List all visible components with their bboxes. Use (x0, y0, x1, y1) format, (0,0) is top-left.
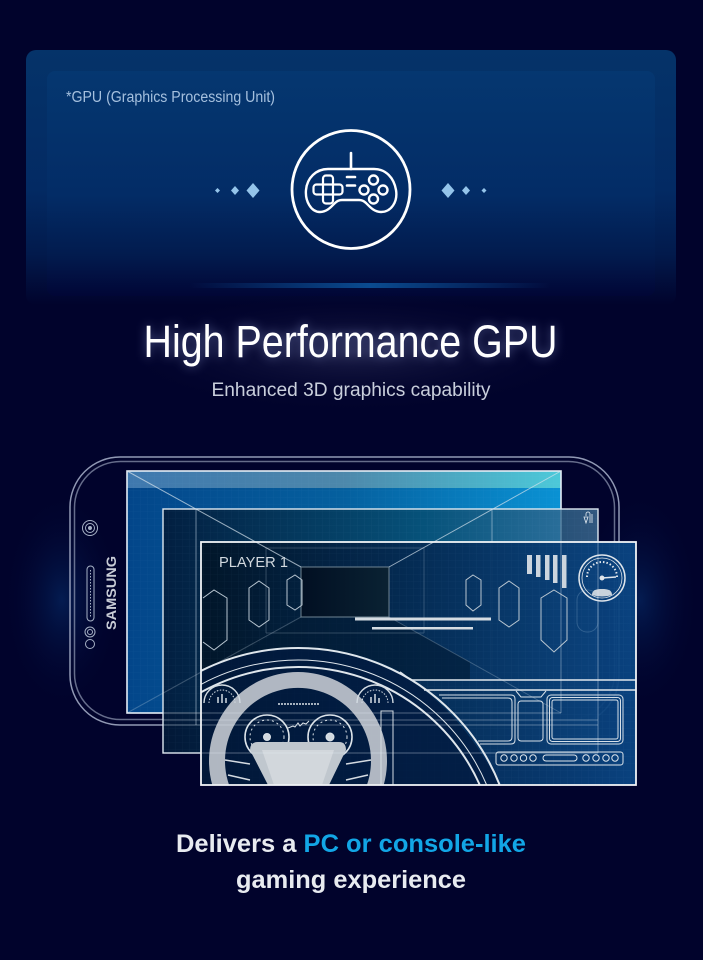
panel: top outer card (26, 50, 676, 305)
faint rounded shape (577, 590, 598, 632)
caption line 1: Delivers a PC or console-like (176, 830, 526, 858)
layer 1: back blue screen (127, 471, 561, 713)
phone camera and sensors (82, 520, 98, 648)
tunnel perspective (127, 471, 561, 713)
phone brand: SAMSUNG (103, 556, 119, 630)
illustration: phone with graphics layers (70, 457, 636, 785)
road lines (355, 618, 491, 630)
hexagon markers (203, 575, 567, 652)
footnote: GPU definition: *GPU (Graphics Processing Unit) (66, 89, 275, 106)
overlapping layer edges (127, 542, 598, 753)
small side gauges (204, 685, 393, 785)
icon: game controller in circle (292, 130, 410, 248)
cockpit shade (201, 648, 500, 785)
player label: PLAYER 1 (219, 554, 288, 571)
phone outline (70, 457, 619, 725)
icon: left diamonds (215, 183, 260, 198)
panel: top inner card (47, 71, 655, 296)
dashboard buttons (496, 752, 623, 765)
layer 2: middle wireframe (163, 509, 598, 753)
steering wheel (209, 672, 387, 785)
caption line 2: gaming experience (236, 866, 466, 894)
dashboard lines (400, 672, 636, 690)
dashboard arcs (201, 648, 500, 785)
icon: right diamonds (442, 183, 486, 198)
signal bars (527, 555, 566, 588)
speedometer (579, 555, 625, 601)
instrument cluster (245, 704, 352, 759)
heading glow: High Performance GPU (144, 316, 558, 367)
subheading: Enhanced 3D graphics capability (212, 380, 491, 401)
side glows behind phone (2, 490, 700, 710)
layer 3: front game screen (201, 542, 636, 785)
highlight bar (190, 283, 550, 288)
title glow (112, 290, 592, 414)
steering wheel hub (250, 742, 346, 785)
dashboard panels (439, 691, 623, 744)
front screen frame (201, 542, 636, 785)
heading: High Performance GPU (144, 316, 558, 367)
